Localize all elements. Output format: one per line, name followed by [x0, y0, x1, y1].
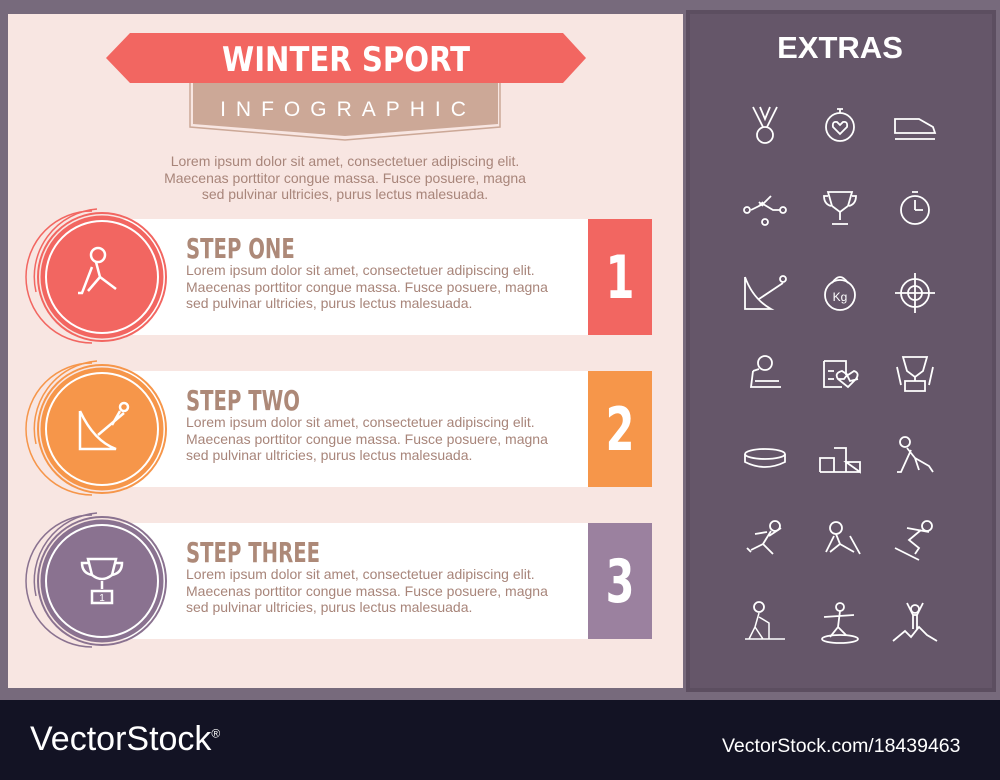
intro text	[164, 153, 526, 202]
intro text: Maecenas porttitor congue massa. Fusce posuere, magna	[164, 170, 526, 186]
intro text: sed pulvinar ultricies, purus lectus malesuada.	[202, 186, 488, 202]
intro text: Lorem ipsum dolor sit amet, consectetuer adipiscing elit.	[171, 153, 519, 169]
step two: sed pulvinar ultricies, purus lectus malesuada.	[186, 447, 472, 463]
step three: sed pulvinar ultricies, purus lectus malesuada.	[186, 599, 472, 615]
bottom bar: VectorStock®	[30, 720, 220, 758]
left panel	[8, 14, 683, 688]
step three: Maecenas porttitor congue massa. Fusce posuere, magna	[186, 582, 548, 598]
text: 3	[606, 546, 634, 616]
step two	[100, 371, 588, 487]
bottom bar	[0, 700, 1000, 780]
step one: Lorem ipsum dolor sit amet, consectetuer adipiscing elit.	[186, 262, 535, 278]
step three: Lorem ipsum dolor sit amet, consectetuer adipiscing elit.	[186, 566, 535, 582]
extras heading: EXTRAS	[777, 30, 903, 65]
step one: Maecenas porttitor congue massa. Fusce posuere, magna	[186, 278, 548, 294]
title banner: INFOGRAPHIC	[220, 98, 476, 121]
step one	[100, 219, 588, 335]
step one: sed pulvinar ultricies, purus lectus malesuada.	[186, 295, 472, 311]
bottom bar: VectorStock.com/18439463	[722, 735, 960, 757]
step one: STEP ONE	[186, 232, 295, 265]
title banner	[106, 33, 586, 141]
title banner: WINTER SPORT	[222, 40, 470, 80]
step circles: 1	[99, 593, 105, 604]
step three	[100, 523, 588, 639]
right panel	[690, 14, 992, 688]
step two: STEP TWO	[186, 384, 300, 417]
step three: STEP THREE	[186, 536, 320, 569]
text: 1	[606, 242, 634, 312]
text: 2	[606, 394, 634, 464]
step two: Maecenas porttitor congue massa. Fusce posuere, magna	[186, 430, 548, 446]
step circles	[25, 208, 167, 648]
step two: Lorem ipsum dolor sit amet, consectetuer adipiscing elit.	[186, 414, 535, 430]
icon grid	[743, 106, 938, 644]
icon grid: Kg	[833, 290, 847, 304]
